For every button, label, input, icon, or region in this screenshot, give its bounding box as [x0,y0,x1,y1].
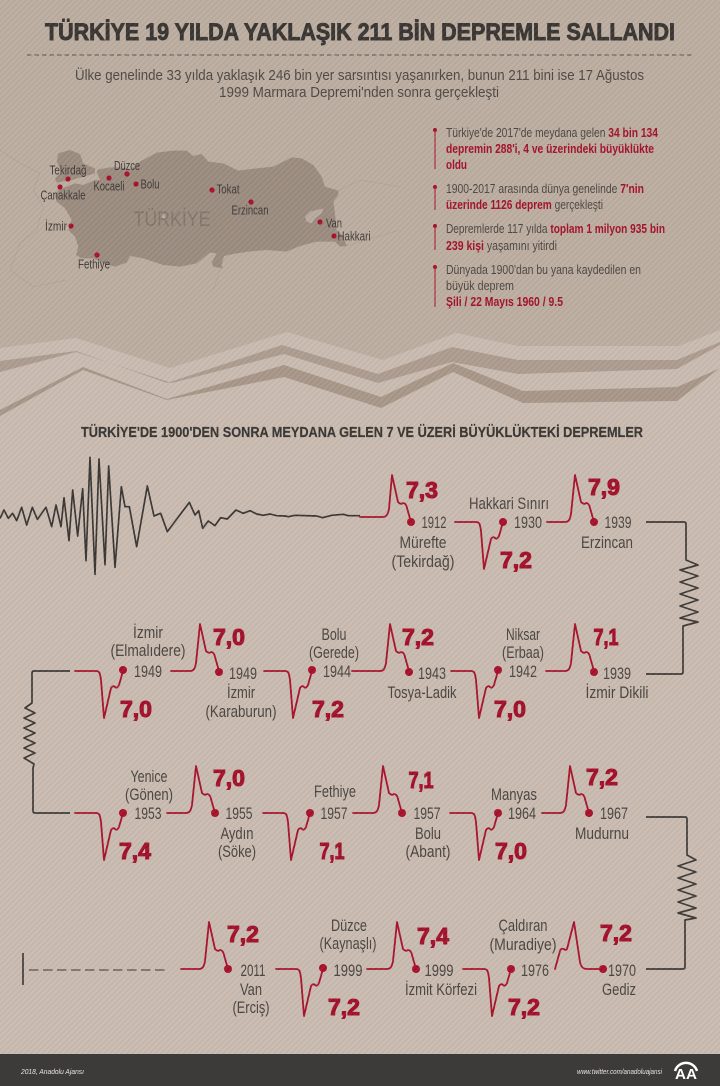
earthquake 1942 Niksar Erbaa 7,0: (Erbaa) [502,644,544,662]
earthquake 1970 Gediz 7,2: 7,2 [600,920,632,946]
earthquake 1930 Hakkari Sınırı 7,2 [455,495,549,573]
earthquake 1976 Çaldıran Muradiye 7,2: 1976 [521,962,549,980]
earthquake 1942 Niksar Erbaa 7,0 [451,626,544,722]
footer bar [0,1054,720,1086]
fact: biggest earthquake [433,262,641,309]
map label: country name: TÜRKİYE [134,208,210,231]
zigzag band: upper [0,342,720,383]
earthquake 1912 Mürefte 7,3: 7,3 [406,477,438,503]
earthquake 1942 Niksar Erbaa 7,0: Niksar [506,626,540,644]
earthquake 1912 Mürefte 7,3: 1912 [422,514,446,532]
earthquake 1949 İzmir Karaburun 7,0: (Karaburun) [206,703,276,721]
earthquake 1949 İzmir Karaburun 7,0: 7,0 [213,624,245,650]
earthquake 2011 Van Erciş 7,2: (Erciş) [232,999,270,1017]
earthquake 1999 Düzce Kaynaşlı 7,2: Düzce [331,917,367,935]
earthquake 1949 İzmir Elmalıdere 7,0: 7,0 [120,696,152,722]
earthquake 1957 Bolu Abant 7,1: Bolu [415,825,441,843]
earthquake 1953 Yenice Gönen 7,4: Yenice [130,768,168,786]
earthquake 1957 Fethiye 7,1: 1957 [320,805,348,823]
earthquake 1957 Fethiye 7,1 [263,783,356,864]
earthquake 1967 Mudurnu 7,2 [542,764,629,843]
fact: lives lost: Depremlerde 117 yılda toplam 1 milyon 935 bin [446,221,665,236]
earthquake 1930 Hakkari Sınırı 7,2: 7,2 [500,547,532,573]
earthquake 1949 İzmir Elmalıdere 7,0: İzmir [133,623,163,642]
connector spring: row 3 to row 4 [646,817,696,969]
map points and city names: Düzce [114,159,140,173]
earthquake 1955 Aydın Söke 7,0: (Söke) [218,843,256,861]
fact: world earthquakes 1900-2017 [433,181,644,212]
earthquake 1939 Erzincan 7,9: Erzincan [581,534,633,552]
earthquake 1957 Fethiye 7,1: Fethiye [314,783,356,801]
connector spring: row 2 to row 3 [24,671,70,813]
earthquake 1970 Gediz 7,2 [555,920,636,999]
fact: 2017 earthquakes: Türkiye'de 2017'de meydana gelen 34 bin 134 [446,125,659,140]
fact: biggest earthquake: Şili / 22 Mayıs 1960 / 9.5 [446,294,563,309]
map points and city names: Hakkari [338,230,370,244]
earthquake 1999 Düzce Kaynaşlı 7,2: 1999 [334,962,362,980]
earthquake 1939 Erzincan 7,9: 1939 [604,514,632,532]
map points and city names: Fethiye [78,258,110,272]
earthquake 1964 Manyas 7,0: Manyas [491,786,537,804]
subtitle: 1999 Marmara Depremi'nden sonra gerçekleşti [219,84,499,101]
subtitle: Ülke genelinde 33 yılda yaklaşık 246 bin yer sarsıntısı yaşanırken, bunun 211 bini ise 17 Ağustos [75,66,644,84]
fact: 2017 earthquakes: depremin 288'i, 4 ve üzerindeki büyüklükte [446,141,654,156]
earthquake 1939 İzmir Dikili 7,1: 1939 [603,665,631,683]
earthquake 1942 Niksar Erbaa 7,0: 7,0 [494,696,526,722]
earthquake 1967 Mudurnu 7,2: 1967 [600,805,628,823]
map points and city names [40,159,370,272]
earthquake 1955 Aydın Söke 7,0: 1955 [226,805,252,823]
earthquake 1999 İzmit Körfezi 7,4: İzmit Körfezi [405,980,477,999]
fact: 2017 earthquakes [433,125,659,172]
earthquake 1912 Mürefte 7,3 [360,475,454,571]
connector spring: row 1 to row 2 [646,522,698,674]
fact: lives lost: 239 kişi yaşamını yitirdi [446,238,557,253]
map points and city names: Erzincan [232,204,269,218]
fact: world earthquakes 1900-2017: 1900-2017 arasında dünya genelinde 7'nin [446,181,644,196]
earthquake 1999 Düzce Kaynaşlı 7,2: 7,2 [328,994,360,1020]
earthquake 1964 Manyas 7,0: 1964 [508,805,536,823]
earthquake 1953 Yenice Gönen 7,4: (Gönen) [125,786,173,804]
earthquake 1957 Fethiye 7,1: 7,1 [320,838,345,864]
subtitle [75,66,644,101]
section heading: TÜRKİYE'DE 1900'DEN SONRA MEYDANA GELEN 7 VE ÜZERİ BÜYÜKLÜKTEKİ DEPREMLER [81,424,643,441]
icon: agency logo: AA [675,1066,697,1083]
fact: world earthquakes 1900-2017: üzerinde 1126 deprem gerçekleşti [446,197,603,212]
earthquake 1939 İzmir Dikili 7,1 [546,624,648,702]
map points and city names: Kocaeli [94,180,124,194]
earthquake 1953 Yenice Gönen 7,4 [75,768,173,864]
earthquake 1949 İzmir Karaburun 7,0 [171,624,276,721]
earthquake 1970 Gediz 7,2: 1970 [608,962,636,980]
earthquake 2011 Van Erciş 7,2: 2011 [240,962,266,980]
map: Turkey [0,150,400,290]
earthquake 1942 Niksar Erbaa 7,0: 1942 [509,663,537,681]
map points and city names: İzmir [45,220,67,234]
earthquake 1943 Tosya-Ladik 7,2: 7,2 [402,624,434,650]
earthquake 1939 İzmir Dikili 7,1: İzmir Dikili [586,683,648,702]
earthquake 1939 İzmir Dikili 7,1: 7,1 [594,624,619,650]
earthquake 1967 Mudurnu 7,2: Mudurnu [575,825,629,843]
fact: biggest earthquake: Dünyada 1900'dan bu yana kaydedilen en [446,262,641,277]
earthquake 1967 Mudurnu 7,2: 7,2 [586,764,618,790]
earthquake 1939 Erzincan 7,9: 7,9 [588,474,620,500]
earthquake 1999 İzmit Körfezi 7,4 [367,922,477,999]
earthquake 1949 İzmir Elmalıdere 7,0: (Elmalıdere) [110,642,186,660]
earthquake 1944 Bolu Gerede 7,2: 1944 [323,663,351,681]
earthquake 1964 Manyas 7,0 [450,786,537,864]
earthquake 1943 Tosya-Ladik 7,2 [352,624,457,702]
earthquake 1943 Tosya-Ladik 7,2: Tosya-Ladik [388,684,457,702]
earthquake 1912 Mürefte 7,3: Mürefte [400,534,446,552]
earthquake 1953 Yenice Gönen 7,4: 7,4 [119,838,151,864]
earthquake 1957 Bolu Abant 7,1: 7,1 [408,767,434,793]
map points and city names: Van [326,216,342,230]
earthquake 1976 Çaldıran Muradiye 7,2: Çaldıran [498,917,548,935]
earthquake 1976 Çaldıran Muradiye 7,2 [463,917,556,1020]
earthquake 2011 Van Erciş 7,2 [181,921,270,1017]
earthquake 1949 İzmir Karaburun 7,0: 1949 [229,665,257,683]
earthquake 2011 Van Erciş 7,2: Van [240,981,262,999]
seismograph trace [0,457,360,574]
earthquake 1957 Bolu Abant 7,1: 1957 [414,805,440,823]
earthquake 1999 Düzce Kaynaşlı 7,2: (Kaynaşlı) [320,935,376,953]
earthquake 1957 Bolu Abant 7,1 [353,766,450,861]
earthquake 1970 Gediz 7,2: Gediz [602,981,636,999]
earthquake 1944 Bolu Gerede 7,2: (Gerede) [309,644,359,662]
earthquake 1939 Erzincan 7,9 [547,474,633,552]
earthquake 1912 Mürefte 7,3: (Tekirdağ) [392,553,454,571]
earthquake 1949 İzmir Elmalıdere 7,0: 1949 [134,663,162,681]
earthquake 1999 İzmit Körfezi 7,4: 7,4 [417,923,449,949]
footer url: www.twitter.com/anadoluajansi [577,1067,662,1076]
fact: biggest earthquake: büyük deprem [446,278,514,293]
earthquake 1953 Yenice Gönen 7,4: 1953 [134,805,162,823]
map points and city names: Bolu [140,178,160,192]
earthquake 1964 Manyas 7,0: 7,0 [495,838,527,864]
earthquake 1999 Düzce Kaynaşlı 7,2 [276,917,376,1020]
earthquake 1943 Tosya-Ladik 7,2: 1943 [418,665,446,683]
earthquake 1944 Bolu Gerede 7,2 [264,626,359,722]
earthquake 2011 Van Erciş 7,2: 7,2 [227,921,259,947]
upper map background [0,0,720,368]
footer credit: 2018, Anadolu Ajansı [20,1067,84,1076]
earthquake 1957 Bolu Abant 7,1: (Abant) [406,843,450,861]
earthquake 1930 Hakkari Sınırı 7,2: Hakkari Sınırı [469,495,549,513]
earthquake 1944 Bolu Gerede 7,2: Bolu [322,626,346,644]
zigzag band: lower [0,363,720,416]
earthquake 1976 Çaldıran Muradiye 7,2: (Muradiye) [490,936,556,954]
earthquake 1955 Aydın Söke 7,0 [167,765,256,861]
fact: lives lost [433,221,665,253]
earthquake 1955 Aydın Söke 7,0: 7,0 [213,765,245,791]
earthquake 1949 İzmir Karaburun 7,0: İzmir [227,683,255,702]
earthquake 1976 Çaldıran Muradiye 7,2: 7,2 [508,994,540,1020]
map points and city names: Çanakkale [40,188,86,202]
earthquake 1949 İzmir Elmalıdere 7,0 [75,623,186,722]
earthquake 1930 Hakkari Sınırı 7,2: 1930 [514,514,542,532]
earthquake 1999 İzmit Körfezi 7,4: 1999 [424,962,454,980]
map points and city names: Tekirdağ [50,164,87,178]
earthquake 1955 Aydın Söke 7,0: Aydın [220,825,254,843]
earthquake 1944 Bolu Gerede 7,2: 7,2 [312,696,344,722]
timeline end: dashed line and bar [23,953,168,985]
map points and city names: Tokat [216,182,240,196]
fact: 2017 earthquakes: oldu [446,157,467,172]
